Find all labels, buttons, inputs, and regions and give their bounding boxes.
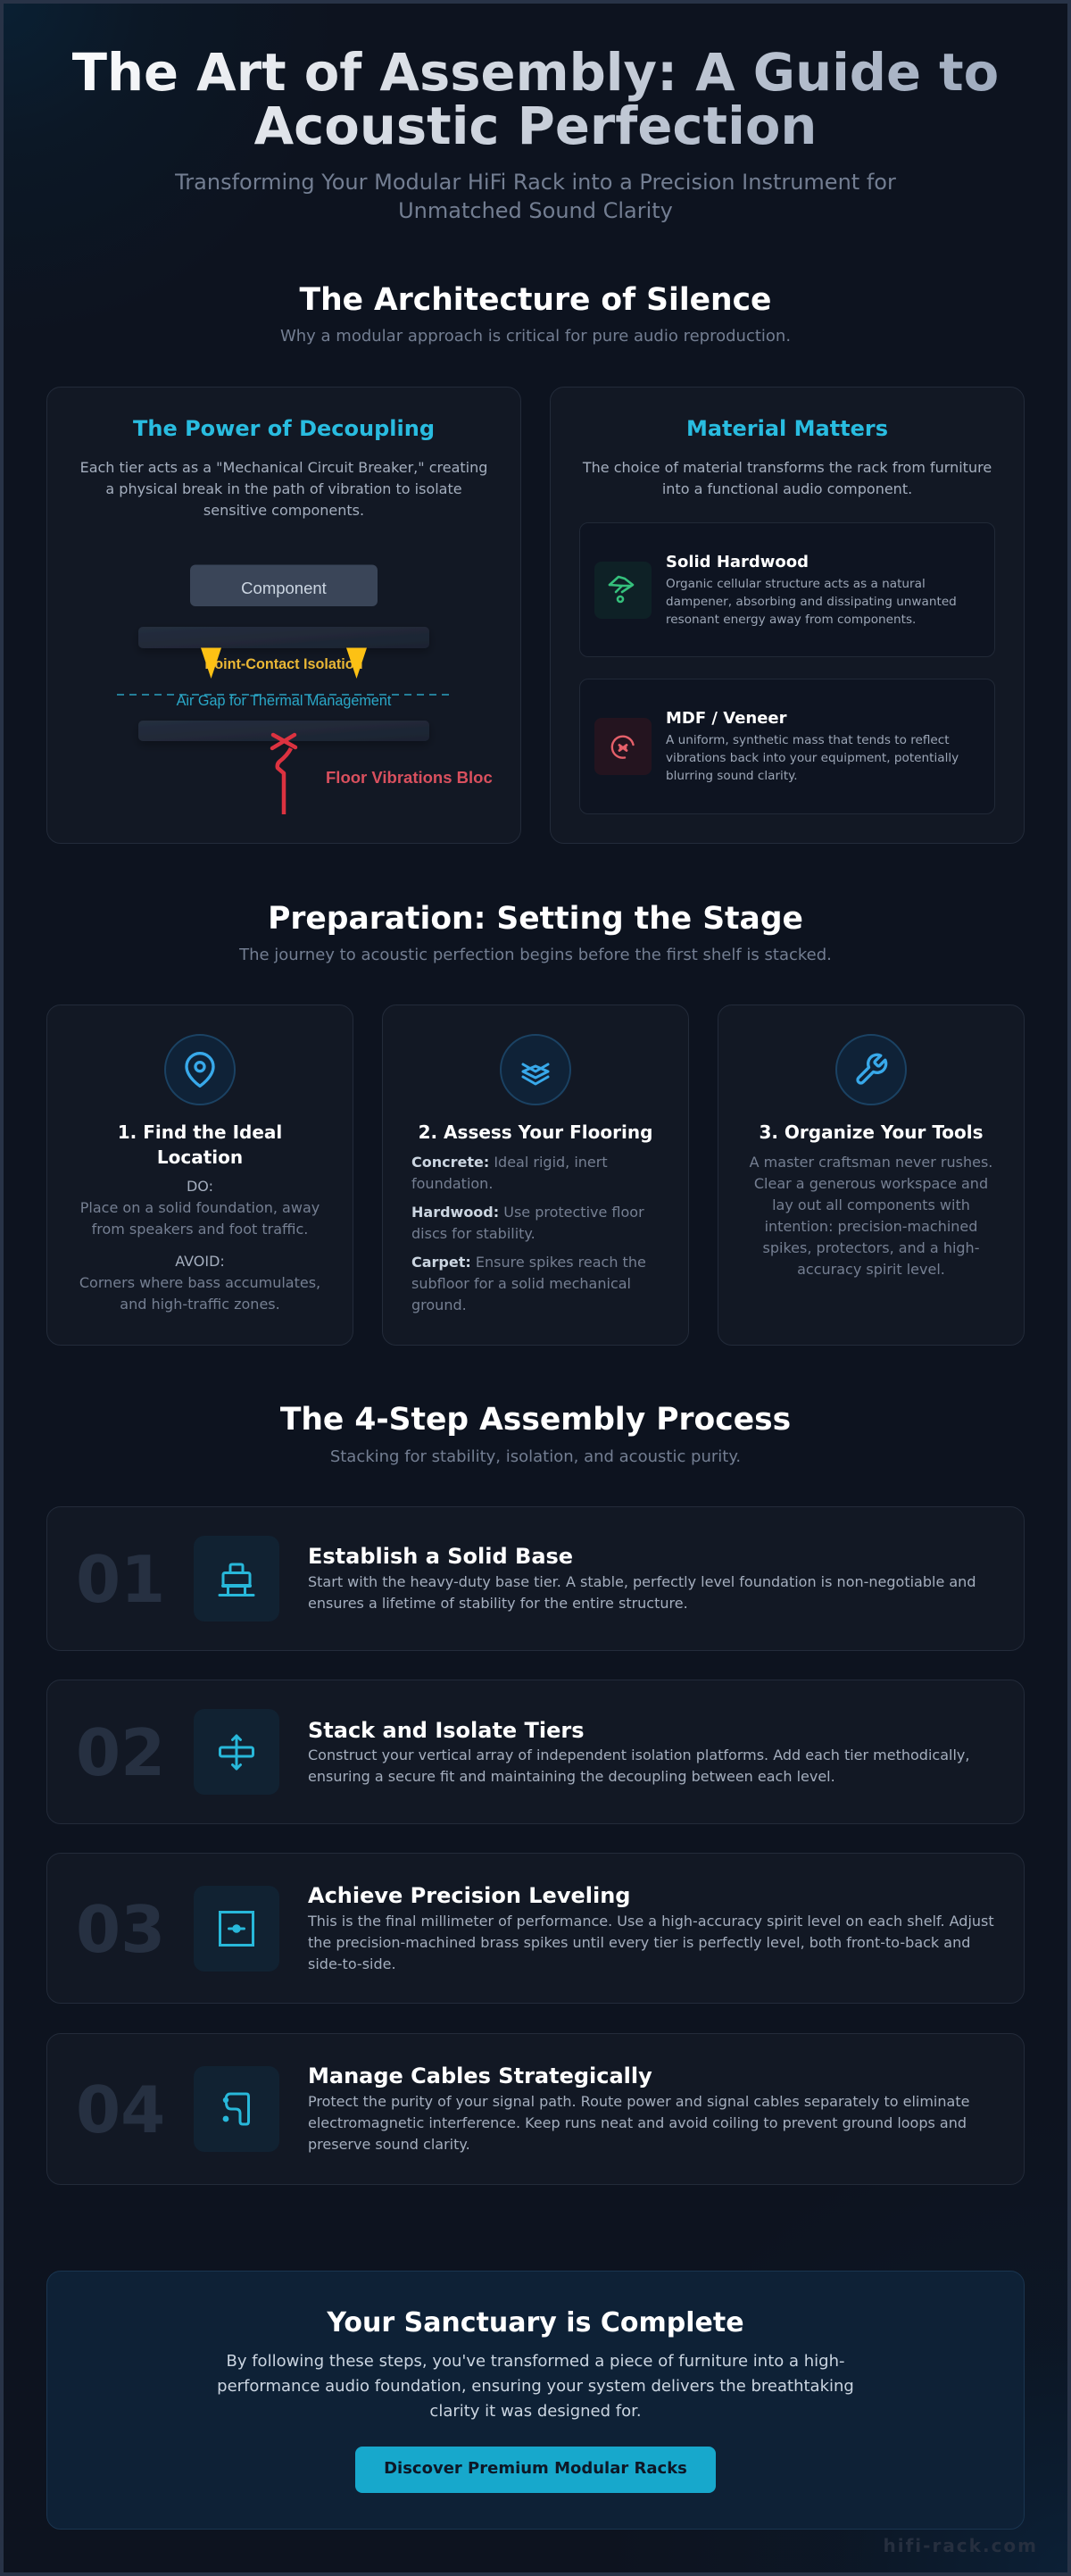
section subtitle: preparation: The journey to acoustic perfection begins before the first shelf is stacked. <box>239 946 832 964</box>
text: mdf description: A uniform, synthetic mass that tends to reflect <box>666 733 950 747</box>
text: call to action: performance audio foundation, ensuring your system delivers the breathtaking <box>217 2377 854 2396</box>
text: flooring types: ground. <box>411 1296 467 1313</box>
heading: architecture of silence: The Architecture of Silence <box>300 282 771 318</box>
label: floor vibrations blocked: Floor Vibrations Blocked <box>326 768 521 787</box>
text: do: Place on a solid foundation, away <box>80 1199 320 1216</box>
panel: call to action <box>46 2271 1025 2530</box>
heading: assess your flooring: 2. Assess Your Flooring <box>419 1121 652 1143</box>
text: solid hardwood description: resonant energy away from components. <box>666 613 916 627</box>
spike: right <box>346 648 367 679</box>
icon: spirit level <box>194 1886 279 1972</box>
icon: hardwood tree <box>594 562 652 619</box>
heading: step 01: Establish a Solid Base <box>308 1544 573 1569</box>
heading: organize your tools: 3. Organize Your Tools <box>759 1121 984 1143</box>
text: step 02 <box>308 1747 969 1785</box>
icon: stack tiers <box>194 1709 279 1795</box>
heading: step 02: Stack and Isolate Tiers <box>308 1718 585 1743</box>
panel: find the ideal location <box>46 1005 353 1346</box>
icon: solid base <box>194 1536 279 1621</box>
lower shelf <box>138 721 429 741</box>
panel: assess your flooring <box>382 1005 689 1346</box>
diagram: decoupling layers <box>117 564 493 814</box>
vibration line blocked <box>272 735 295 814</box>
card: mdf veneer <box>579 679 995 814</box>
text: step 04 <box>308 2093 969 2153</box>
panel: step 04 <box>46 2033 1025 2185</box>
text: step 01 <box>308 1573 976 1612</box>
button: discover racks: Discover Premium Modular Racks <box>384 2459 687 2478</box>
spike: left <box>201 648 221 679</box>
text: flooring types: foundation. Hardwood: Use protective floor <box>411 1175 644 1221</box>
text: organize description: spikes, protectors, and a high- <box>763 1239 979 1256</box>
text: decoupling description <box>80 459 487 519</box>
panel heading: power of decoupling: The Power of Decoupling <box>133 416 435 441</box>
text: call to action <box>217 2352 854 2421</box>
heading: mdf veneer: MDF / Veneer <box>666 709 787 728</box>
panel heading: material matters: Material Matters <box>686 416 888 441</box>
text: step 02: ensuring a secure fit and maintaining the decoupling between each level. <box>308 1768 835 1785</box>
text: step 03: This is the final millimeter of performance. Use a high-accuracy spirit level on each shelf. Adjust <box>308 1913 994 1930</box>
component block: Component <box>241 579 327 597</box>
text: avoid: and high-traffic zones. <box>120 1296 280 1313</box>
subtitle: Transforming Your Modular HiFi Rack into a Precision Instrument for <box>175 170 896 195</box>
text: step 01: ensures a lifetime of stability for the entire structure. <box>308 1595 688 1612</box>
panel: step 03 <box>46 1853 1025 2004</box>
text: flooring types: Concrete: Ideal rigid, inert <box>411 1154 608 1171</box>
icon: layers <box>500 1034 571 1105</box>
text: step 04: electromagnetic interference. Keep runs neat and avoid coiling to prevent ground loops and <box>308 2114 967 2131</box>
title: Acoustic Perfection <box>254 96 817 156</box>
text: avoid: Corners where bass accumulates, <box>79 1274 320 1291</box>
text: flooring types: subfloor for a solid mechanical <box>411 1275 631 1292</box>
heading: assembly process: The 4-Step Assembly Process <box>280 1402 791 1438</box>
text: organize description <box>750 1154 992 1278</box>
heading: step 04: Manage Cables Strategically <box>308 2063 652 2088</box>
text: decoupling description: sensitive components. <box>203 502 364 519</box>
text: step 01: Start with the heavy-duty base tier. A stable, perfectly level foundation is non-negotiable and <box>308 1573 976 1590</box>
section subtitle: architecture: Why a modular approach is critical for pure audio reproduction. <box>280 327 791 346</box>
text: do: DO: <box>187 1178 213 1195</box>
number: 03: 03 <box>76 1892 165 1967</box>
text: step 04: Protect the purity of your signal path. Route power and signal cables separately to eliminate <box>308 2093 969 2110</box>
text: do <box>80 1178 320 1238</box>
text: material description: into a functional audio component. <box>662 480 912 497</box>
number: 02: 02 <box>76 1715 165 1790</box>
subtitle: Unmatched Sound Clarity <box>398 198 673 223</box>
text: solid hardwood description <box>666 577 957 627</box>
panel: power of decoupling <box>46 387 521 844</box>
panel: organize your tools <box>718 1005 1025 1346</box>
text: flooring types: discs for stability. Carpet: Ensure spikes reach the <box>411 1225 646 1271</box>
number: 01: 01 <box>76 1542 165 1617</box>
icon: cable routing <box>194 2066 279 2152</box>
text: step 03: side-to-side. <box>308 1955 396 1972</box>
section subtitle: assembly: Stacking for stability, isolation, and acoustic purity. <box>330 1447 741 1466</box>
card: solid hardwood <box>579 522 995 657</box>
title <box>46 46 1025 154</box>
text: organize description: lay out all components with <box>772 1196 970 1213</box>
text: material description: The choice of material transforms the rack from furniture <box>583 459 992 476</box>
icon: wrench <box>835 1034 907 1105</box>
text: organize description: A master craftsman never rushes. <box>750 1154 992 1171</box>
text: step 02: Construct your vertical array of independent isolation platforms. Add each tier methodically, <box>308 1747 969 1763</box>
heading: call to action: Your Sanctuary is Complete <box>327 2307 744 2338</box>
text: step 03: the precision-machined brass spikes until every tier is perfectly level, both front-to-back and <box>308 1934 970 1951</box>
heading: solid hardwood: Solid Hardwood <box>666 553 809 571</box>
upper shelf <box>138 627 429 648</box>
component block <box>190 564 378 606</box>
text: do: from speakers and foot traffic. <box>92 1221 308 1238</box>
label: point-contact isolation: Point-Contact Isolation <box>204 656 363 672</box>
text: call to action: clarity it was designed for. <box>429 2402 642 2421</box>
watermark: hifi-rack.com <box>884 2535 1038 2556</box>
text: organize description: intention: precision-machined <box>765 1218 977 1235</box>
text: solid hardwood description: dampener, absorbing and dissipating unwanted <box>666 595 957 609</box>
text: step 04: preserve sound clarity. <box>308 2136 470 2153</box>
title: The Art of Assembly: A Guide to <box>72 43 999 103</box>
panel: step 02 <box>46 1680 1025 1824</box>
label: air gap: Air Gap for Thermal Management <box>177 693 392 709</box>
heading: preparation: Preparation: Setting the Stage <box>268 901 803 937</box>
text: organize description: accuracy spirit level. <box>797 1261 945 1278</box>
text: organize description: Clear a generous workspace and <box>754 1175 988 1192</box>
text: decoupling description: a physical break in the path of vibration to isolate <box>105 480 462 497</box>
text: mdf description: vibrations back into your equipment, potentially <box>666 751 959 765</box>
panel: material matters <box>550 387 1025 844</box>
heading: find the ideal location <box>118 1121 282 1168</box>
heading: find the ideal location: Location <box>157 1146 243 1168</box>
text: mdf description: blurring sound clarity. <box>666 769 798 783</box>
text: material description <box>582 459 992 497</box>
subtitle <box>175 170 896 223</box>
text: step 03 <box>307 1913 994 1972</box>
text: avoid <box>79 1253 320 1313</box>
text: avoid: AVOID: <box>175 1253 225 1270</box>
text: solid hardwood description: Organic cellular structure acts as a natural <box>666 577 926 591</box>
heading: find the ideal location: 1. Find the Ideal <box>118 1121 282 1143</box>
text: decoupling description: Each tier acts as a "Mechanical Circuit Breaker," creating <box>80 459 487 476</box>
button: discover racks <box>355 2447 716 2493</box>
air gap line <box>117 694 449 696</box>
icon: mdf warning <box>594 718 652 775</box>
text: flooring types <box>411 1154 646 1313</box>
text: mdf description <box>666 733 959 783</box>
panel: step 01 <box>46 1506 1025 1651</box>
number: 04: 04 <box>76 2072 165 2147</box>
heading: step 03: Achieve Precision Leveling <box>308 1883 630 1908</box>
text: call to action: By following these steps, you've transformed a piece of furniture into a high- <box>227 2352 844 2371</box>
icon: map pin <box>164 1034 236 1105</box>
